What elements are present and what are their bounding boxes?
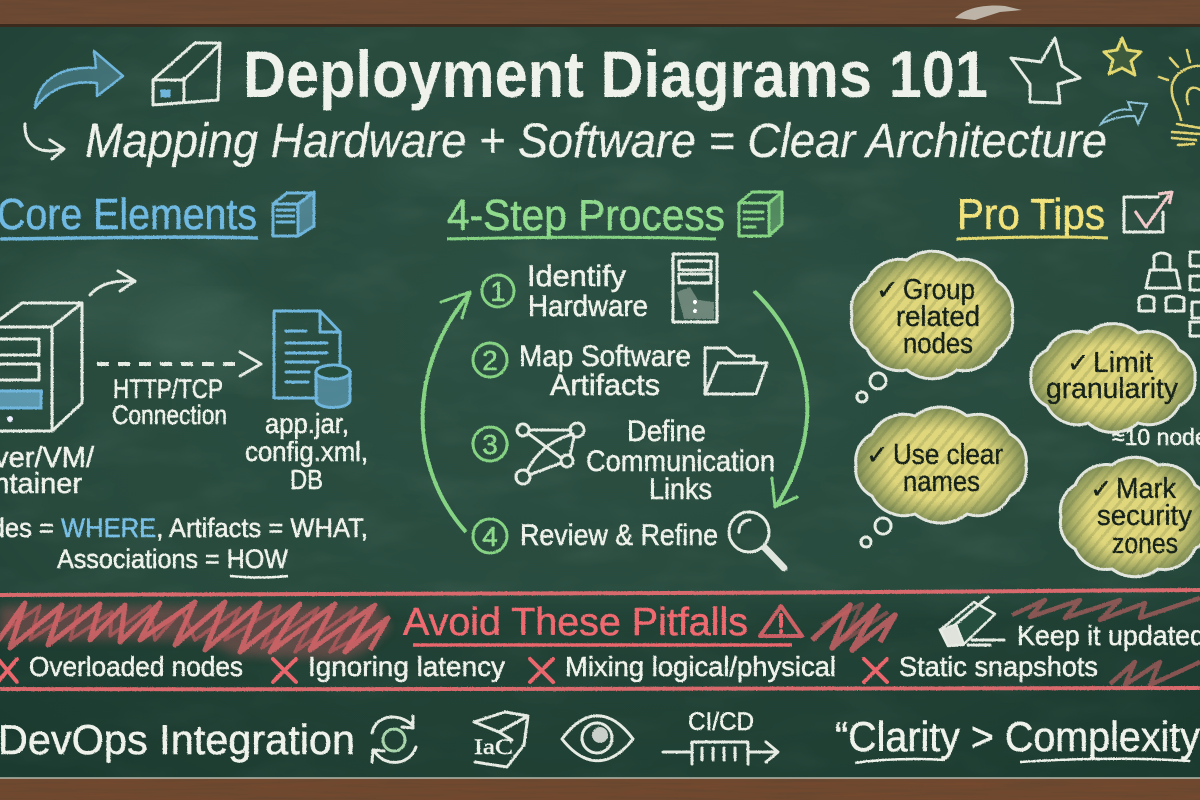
tip: mark security zones: ✓	[1090, 474, 1113, 504]
tip: use clear names: Use clear	[893, 439, 1003, 471]
tip: group related nodes: nodes	[903, 328, 973, 360]
heading: avoid these pitfalls: Avoid These Pitfalls	[403, 601, 748, 644]
thought bubbles	[861, 518, 891, 547]
icon: eye	[562, 716, 633, 761]
icon: cycle	[372, 716, 416, 762]
icon: eraser	[940, 597, 1004, 646]
icon: server	[0, 303, 82, 431]
tip: group related nodes: Group	[903, 274, 975, 306]
title: Deployment Diagrams 101	[243, 37, 988, 111]
label: artifacts: app.jar,	[265, 408, 349, 439]
icon: IaC cube: IaC	[474, 734, 513, 759]
tip: group related nodes: ✓	[876, 275, 899, 305]
step 4: 4	[482, 521, 498, 552]
icon: network links	[516, 423, 584, 484]
subtitle: Mapping Hardware + Software = Clear Architecture	[85, 115, 1107, 168]
header	[25, 37, 1200, 168]
step 2: Map Software	[519, 340, 691, 373]
icon: CI/CD pipeline	[663, 708, 778, 764]
panel: avoid these pitfalls	[0, 590, 1200, 689]
tip: mark security zones	[1060, 457, 1200, 577]
icon: small white arrow	[90, 271, 135, 295]
pitfall: ignoring latency: Ignoring latency	[308, 651, 505, 682]
arrow: cycle left	[423, 292, 470, 532]
chalk border lines	[0, 590, 1200, 689]
pitfall: static snapshots: Static snapshots	[899, 651, 1098, 682]
label: devops integration: DevOps Integration	[0, 716, 355, 763]
arrow: cycle right	[754, 291, 807, 507]
icon: star outline	[1011, 38, 1080, 103]
step 1: 1	[490, 276, 506, 307]
tip: use clear names: names	[903, 466, 980, 498]
arrow: dashed connection	[97, 352, 261, 376]
tip: group related nodes	[851, 251, 1013, 379]
panel: 4-step process	[423, 191, 807, 568]
icon: server tower	[673, 254, 717, 322]
label: artifacts	[245, 408, 368, 495]
heading: 4-step process: 4-Step Process	[447, 191, 725, 240]
wood frame: top	[0, 0, 1200, 27]
step 2: 2	[482, 345, 498, 376]
heading: pro tips: Pro Tips	[957, 190, 1105, 239]
heading: core elements: Core Elements	[0, 190, 257, 239]
step 4: Review & Refine	[520, 519, 718, 552]
tip: limit granularity: Limit	[1093, 347, 1153, 379]
icon: blue swoosh arrow	[35, 51, 123, 108]
step 1: Identify	[527, 260, 626, 293]
step 1	[482, 260, 648, 323]
icon: folder	[705, 348, 767, 394]
tip: mark security zones: zones	[1112, 528, 1178, 560]
label: http/tcp connection: Connection	[112, 400, 227, 430]
step 3	[473, 415, 775, 506]
panel: pro tips	[851, 190, 1200, 577]
icon: blue server box	[273, 192, 314, 236]
icon: node hierarchy	[1139, 252, 1200, 336]
step 3: Communication	[586, 445, 775, 478]
tip: limit granularity: granularity	[1046, 373, 1178, 405]
pitfall: mixing logical/physical: Mixing logical/physical	[565, 651, 836, 682]
step 2	[473, 340, 691, 402]
tip: limit granularity	[1031, 324, 1195, 432]
icon: IaC cube	[474, 712, 528, 767]
icon: green box	[739, 192, 782, 236]
icon: deployment node box	[153, 43, 220, 105]
panel: core elements	[0, 190, 368, 578]
icon: artifact document with database	[274, 311, 350, 408]
icon: small chalk arrow	[1101, 102, 1147, 124]
icon: magnifier	[729, 512, 784, 568]
step 3: Links	[649, 473, 712, 506]
icon: small curved arrow	[25, 124, 64, 159]
red chalk scribbles	[0, 598, 1200, 685]
step 2: Artifacts	[550, 369, 660, 402]
tip: use clear names	[856, 407, 1026, 523]
pitfall: overloaded nodes: Overloaded nodes	[29, 651, 243, 682]
step 3: Define	[627, 415, 706, 448]
summary text	[0, 513, 368, 578]
label: artifacts: DB	[290, 464, 323, 495]
summary text: Associations = HOW	[57, 544, 288, 574]
label: artifacts: config.xml,	[245, 436, 368, 467]
tip: use clear names: ✓	[866, 440, 889, 470]
icon: light bulb	[1159, 50, 1200, 145]
icon: yellow star	[1104, 38, 1141, 75]
footer: devops integration	[0, 708, 1200, 767]
label: http/tcp connection: HTTP/TCP	[113, 374, 223, 404]
tip: group related nodes: related	[896, 301, 980, 333]
label: http/tcp connection	[112, 374, 227, 430]
step 1: Hardware	[528, 290, 648, 323]
thought bubbles	[857, 373, 886, 402]
step 3: 3	[482, 429, 498, 460]
wood frame: bottom	[0, 777, 1200, 800]
icon: checkbox	[1124, 192, 1172, 232]
icon: CI/CD pipeline: CI/CD	[688, 708, 754, 736]
tip: limit granularity: ✓	[1067, 348, 1090, 378]
tip: mark security zones: security	[1097, 500, 1192, 532]
icon: warning triangle	[760, 606, 802, 636]
tip: mark security zones: Mark	[1116, 473, 1176, 505]
